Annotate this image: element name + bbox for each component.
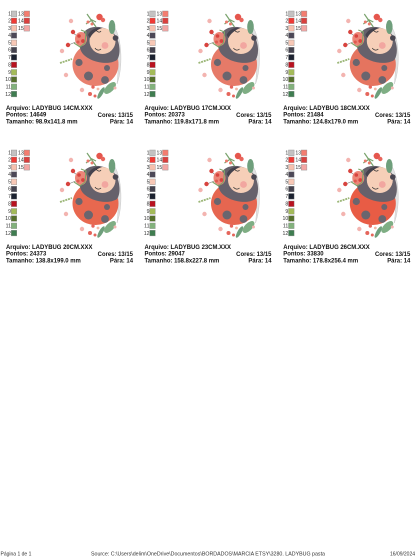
file details: Cores: 13/15	[98, 113, 134, 119]
colour swatches: 8	[8, 62, 11, 68]
file details: Pontos: 14649	[6, 112, 47, 118]
file details: Cores: 13/15	[98, 252, 134, 258]
colour swatches: 1	[285, 150, 288, 156]
colour swatches: 14	[295, 18, 301, 24]
colour swatches: 2	[285, 18, 288, 24]
colour swatches: 3	[8, 26, 11, 32]
illustration: ladybug	[60, 14, 121, 100]
colour swatches: 14	[18, 18, 24, 24]
illustration: ladybug	[198, 14, 259, 100]
colour swatches: 1	[147, 12, 150, 18]
file details: Pára: 14	[110, 120, 134, 126]
colour swatches: 15	[18, 165, 24, 171]
colour swatches: 11	[6, 224, 11, 230]
file details: Arquivo: LADYBUG 20CM.XXX	[6, 245, 92, 251]
colour swatches: 8	[285, 202, 288, 208]
file details: Arquivo: LADYBUG 23CM.XXX	[144, 245, 231, 251]
file details	[144, 245, 272, 264]
colour swatches: 2	[8, 18, 11, 24]
colour swatches: 10	[5, 77, 11, 83]
panel: LADYBUG 20CM	[5, 150, 134, 264]
colour swatches: 11	[144, 84, 150, 90]
colour swatches: 12	[144, 231, 150, 237]
colour swatches: 3	[147, 26, 150, 32]
illustration: ladybug	[337, 14, 398, 100]
file details: Arquivo: LADYBUG 26CM.XXX	[283, 245, 370, 251]
colour swatches: 7	[285, 55, 288, 61]
colour swatches: 6	[285, 48, 288, 54]
colour swatches: 7	[147, 55, 150, 61]
colour swatches: 12	[283, 92, 288, 98]
file details: Arquivo: LADYBUG 17CM.XXX	[144, 106, 231, 112]
colour swatches: 2	[285, 158, 288, 164]
colour swatches: 13	[18, 150, 24, 156]
file details: Cores: 13/15	[375, 252, 411, 258]
illustration: ladybug	[60, 153, 121, 239]
colour swatches: 1	[147, 150, 150, 156]
colour swatches: 15	[295, 165, 301, 171]
colour swatches: 8	[147, 202, 150, 208]
colour swatches: 13	[18, 12, 24, 18]
colour swatches: 15	[157, 26, 162, 32]
colour swatches: 5	[285, 40, 288, 46]
colour swatches: 5	[147, 180, 150, 186]
colour swatches: 1	[285, 12, 288, 18]
colour swatches: 6	[147, 48, 150, 54]
colour swatches: 14	[157, 158, 162, 164]
file details: Pára: 14	[387, 258, 411, 264]
file details	[283, 106, 411, 126]
file details: Pontos: 20373	[144, 112, 185, 118]
colour swatches: 5	[8, 40, 11, 46]
file details: Tamanho: 158.8x227.8 mm	[144, 258, 219, 264]
colour swatches: 14	[295, 158, 301, 164]
colour swatches	[283, 150, 307, 237]
file details: Pontos: 33830	[283, 252, 324, 258]
colour swatches: 11	[283, 84, 288, 90]
colour swatches: 12	[5, 231, 11, 237]
panel: LADYBUG 23CM	[144, 150, 272, 264]
file details	[144, 106, 272, 126]
colour swatches: 4	[8, 33, 11, 39]
colour swatches: 15	[157, 165, 162, 171]
illustration: ladybug	[337, 153, 398, 239]
file details: Pontos: 21484	[283, 112, 324, 118]
colour swatches: 1	[8, 12, 11, 18]
colour swatches: 6	[8, 48, 11, 54]
colour swatches: 13	[157, 12, 162, 18]
colour swatches: 10	[5, 216, 11, 222]
colour swatches: 4	[285, 172, 288, 178]
panel: LADYBUG 14CM	[5, 11, 134, 126]
file details: Pára: 14	[248, 120, 272, 126]
file details: Cores: 13/15	[236, 252, 272, 258]
colour swatches: 3	[8, 165, 11, 171]
colour swatches: 5	[285, 180, 288, 186]
colour swatches: 7	[147, 194, 150, 200]
colour swatches: 13	[295, 150, 301, 156]
colour swatches: 2	[147, 158, 150, 164]
colour swatches: 5	[8, 180, 11, 186]
file details: Pontos: 24373	[6, 252, 47, 258]
illustration: ladybug	[198, 153, 259, 239]
colour swatches	[5, 11, 30, 98]
colour swatches: 13	[295, 12, 301, 18]
colour swatches: 3	[147, 165, 150, 171]
colour swatches: 10	[144, 77, 150, 83]
colour swatches: 7	[8, 194, 11, 200]
colour swatches: 14	[18, 158, 24, 164]
colour swatches: 4	[147, 172, 150, 178]
colour swatches: 5	[147, 40, 150, 46]
colour swatches: 12	[144, 92, 150, 98]
colour swatches: 10	[283, 77, 288, 83]
file details: Pára: 14	[387, 120, 411, 126]
colour swatches: 4	[8, 172, 11, 178]
colour swatches: 8	[8, 202, 11, 208]
colour swatches	[283, 11, 307, 98]
colour swatches: 9	[285, 70, 288, 76]
colour swatches: 9	[8, 209, 11, 215]
colour swatches: 2	[147, 18, 150, 24]
colour swatches: 9	[147, 209, 150, 215]
file details: Pontos: 29047	[144, 252, 185, 258]
file details: Cores: 13/15	[236, 113, 272, 119]
colour swatches	[144, 150, 168, 237]
colour swatches: 6	[285, 187, 288, 193]
colour swatches	[144, 11, 168, 98]
colour swatches: 4	[147, 33, 150, 39]
panel: LADYBUG 26CM	[283, 150, 411, 264]
colour swatches: 8	[285, 62, 288, 68]
colour swatches: 15	[18, 26, 24, 32]
colour swatches: 1	[8, 150, 11, 156]
colour swatches: 7	[285, 194, 288, 200]
colour swatches: 8	[147, 62, 150, 68]
file details: Cores: 13/15	[375, 113, 411, 119]
colour swatches: 6	[8, 187, 11, 193]
colour swatches: 9	[285, 209, 288, 215]
file details: Arquivo: LADYBUG 14CM.XXX	[6, 106, 92, 112]
colour swatches: 4	[285, 33, 288, 39]
footer	[0, 552, 415, 557]
colour swatches: 2	[8, 158, 11, 164]
colour swatches: 10	[283, 216, 288, 222]
colour swatches: 14	[157, 18, 162, 24]
colour swatches: 12	[283, 231, 288, 237]
file details	[6, 106, 134, 126]
colour swatches: 11	[6, 84, 11, 90]
colour swatches: 11	[144, 224, 150, 230]
file details: Arquivo: LADYBUG 18CM.XXX	[283, 106, 370, 112]
colour swatches: 9	[147, 70, 150, 76]
file details	[283, 245, 411, 264]
colour swatches: 7	[8, 55, 11, 61]
panel: LADYBUG 18CM	[283, 11, 411, 126]
file details: Tamanho: 178.8x256.4 mm	[283, 258, 358, 264]
colour swatches: 10	[144, 216, 150, 222]
panel: LADYBUG 17CM	[144, 11, 272, 126]
colour swatches: 15	[295, 26, 301, 32]
colour swatches: 12	[5, 92, 11, 98]
colour swatches: 11	[283, 224, 288, 230]
colour swatches: 9	[8, 70, 11, 76]
colour swatches	[5, 150, 30, 237]
colour swatches: 6	[147, 187, 150, 193]
file details: Pára: 14	[110, 258, 134, 264]
file details	[6, 245, 134, 264]
colour swatches: 3	[285, 165, 288, 171]
colour swatches: 3	[285, 26, 288, 32]
file details: Tamanho: 124.8x179.0 mm	[283, 120, 358, 126]
file details: Tamanho: 98.9x141.8 mm	[6, 120, 78, 126]
colour swatches: 13	[157, 150, 162, 156]
file details: Pára: 14	[248, 258, 272, 264]
file details: Tamanho: 138.8x199.0 mm	[6, 258, 81, 264]
file details: Tamanho: 119.8x171.8 mm	[144, 120, 219, 126]
